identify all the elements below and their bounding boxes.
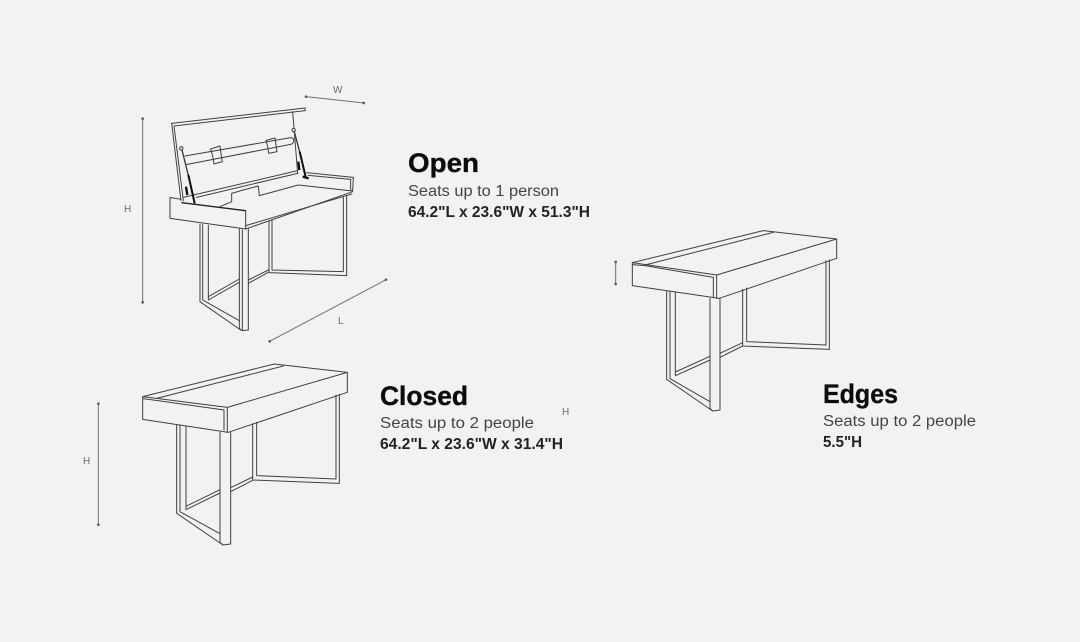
desk top bbox=[143, 364, 347, 432]
lid bbox=[172, 108, 305, 201]
desk top bbox=[632, 231, 837, 298]
heading: edges: Edges bbox=[823, 379, 898, 409]
legs bbox=[177, 394, 339, 545]
legs bbox=[667, 260, 829, 411]
illustration: open desk bbox=[141, 95, 387, 343]
text block: edges bbox=[823, 379, 976, 451]
dimension arrow bbox=[614, 261, 617, 285]
label: L: L bbox=[338, 316, 344, 327]
label: H open: H bbox=[124, 204, 131, 215]
dimension arrow bbox=[97, 402, 100, 526]
stray label: H: H bbox=[562, 407, 569, 418]
illustration: closed desk bbox=[97, 364, 347, 545]
seats: open: Seats up to 1 person bbox=[408, 183, 559, 200]
dimensions: edges: 5.5"H bbox=[823, 434, 862, 451]
illustration: edges desk bbox=[614, 231, 837, 411]
dimensions: closed: 64.2"L x 23.6"W x 31.4"H bbox=[380, 436, 563, 453]
gas struts bbox=[180, 128, 309, 203]
legs bbox=[200, 196, 347, 331]
dimension arrows bbox=[143, 97, 387, 342]
text block: closed bbox=[380, 381, 563, 453]
heading: closed: Closed bbox=[380, 381, 468, 411]
seats: closed: Seats up to 2 people bbox=[380, 415, 534, 432]
label: W: W bbox=[333, 85, 343, 96]
dimensions: open: 64.2"L x 23.6"W x 51.3"H bbox=[408, 204, 590, 221]
label: H closed: H bbox=[83, 456, 90, 467]
seats: edges: Seats up to 2 people bbox=[823, 413, 976, 430]
desk body bbox=[170, 173, 353, 229]
heading: open: Open bbox=[408, 148, 479, 178]
text block: open bbox=[408, 148, 590, 221]
